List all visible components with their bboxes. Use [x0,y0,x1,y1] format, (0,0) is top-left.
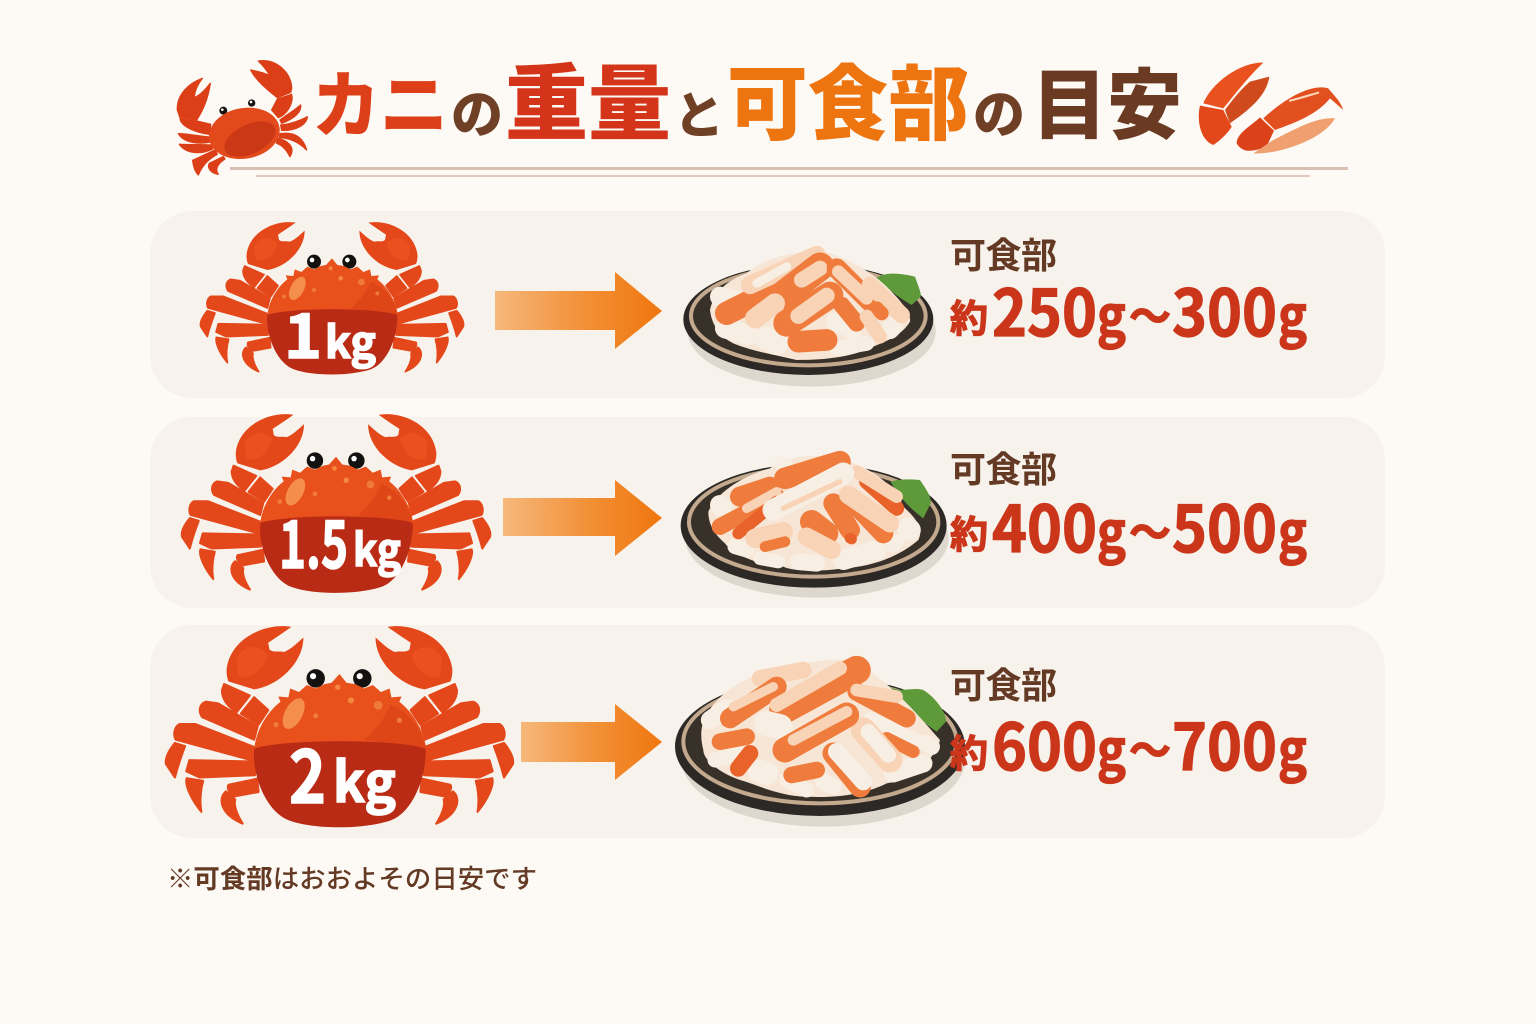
crab: 2kg: kg [333,738,396,818]
edible portion text: 可食部 [950,657,1057,709]
crab: 1kg: 1 [284,289,322,376]
edible portion text: 可食部 [950,227,1057,279]
crab: 2kg [166,626,513,827]
edible portion text: 〜 [1129,497,1171,561]
crab: 1kg: kg [325,307,376,371]
arrow [503,480,662,556]
title [312,37,1182,157]
title underline [230,167,1348,177]
edible portion text: 400 [992,479,1097,571]
plate of crab meat [681,456,949,598]
edible portion text: 約 [950,288,988,343]
title crab claws icon [1199,63,1343,153]
arrow [521,704,662,780]
panel: 1kg [150,211,1385,398]
edible portion text: 約 [950,723,988,778]
footnote: ※可食部はおおよその日安です [167,864,537,894]
edible portion text [950,227,1307,355]
crab: 1.5kg: 1.5 [279,495,348,587]
title: の [973,73,1025,148]
edible portion text: g [1097,706,1126,787]
edible portion text: 可食部 [950,441,1057,493]
edible portion text: g [1097,272,1126,353]
title: の [451,73,503,148]
plate of crab meat [675,660,965,827]
panel: 1.5kg [150,414,1385,608]
edible portion text: 500 [1172,479,1277,571]
title: カニ [312,47,448,152]
crab: 1.5kg [182,414,490,593]
edible portion text: 250 [992,263,1097,355]
edible portion text: 〜 [1129,715,1171,779]
edible portion text: 300 [1172,263,1277,355]
edible portion text [950,441,1307,571]
title crab icon [177,61,307,175]
title: 可食部 [727,38,969,157]
edible portion text: g [1097,488,1126,569]
edible portion text: 600 [992,697,1097,789]
crab: 1kg [200,222,464,376]
title: 重量 [505,37,671,157]
plate of crab meat [683,250,936,387]
edible portion text: 700 [1172,697,1277,789]
edible portion text: 〜 [1129,281,1171,345]
edible portion text: 約 [950,504,988,559]
edible portion text: g [1278,488,1307,569]
title: 目安 [1032,45,1182,156]
arrow [495,272,662,349]
edible portion text: g [1278,272,1307,353]
edible portion text: g [1278,706,1307,787]
edible portion text [950,657,1307,789]
crab: 1.5kg: kg [353,514,401,579]
crab: 2kg: 2 [289,719,326,824]
panel: 2kg [150,625,1385,838]
title: と [674,76,724,148]
